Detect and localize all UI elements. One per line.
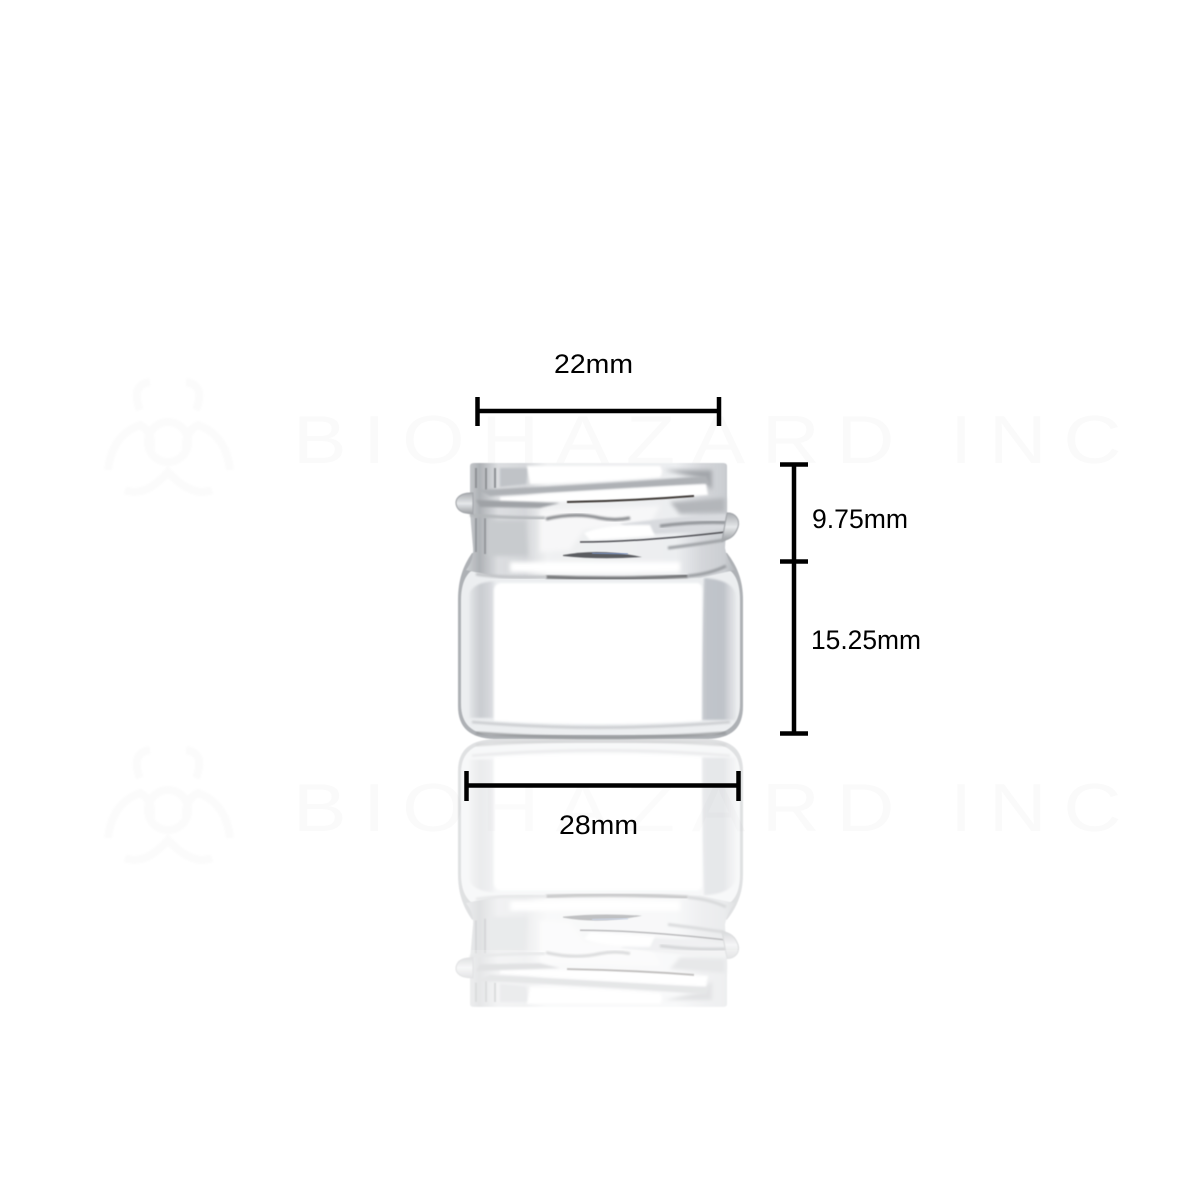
glass jar — [456, 463, 743, 739]
watermark text lower: BIOHAZARD INC — [293, 770, 1138, 846]
watermark icon: biohazard lower — [108, 750, 230, 860]
bracket — [466, 771, 738, 801]
bracket — [780, 464, 808, 561]
dimension: top width 22mm — [477, 349, 719, 426]
jar reflection — [456, 739, 743, 1007]
bracket — [780, 561, 808, 734]
watermark text: BIOHAZARD INC — [293, 402, 1138, 478]
dimension: neck height 9.75mm — [780, 464, 908, 561]
watermark icon: biohazard — [108, 382, 230, 492]
label: 9.75mm — [812, 504, 908, 534]
dimension: body width 28mm — [466, 771, 739, 840]
dimension: body height 15.25mm — [780, 561, 921, 734]
bracket — [478, 397, 719, 426]
label: 22mm — [554, 349, 633, 379]
watermark: bottom — [108, 750, 1138, 860]
label: 28mm — [559, 810, 638, 840]
watermark: top — [108, 382, 1138, 492]
label: 15.25mm — [811, 625, 921, 655]
reflection fade — [450, 950, 750, 1012]
